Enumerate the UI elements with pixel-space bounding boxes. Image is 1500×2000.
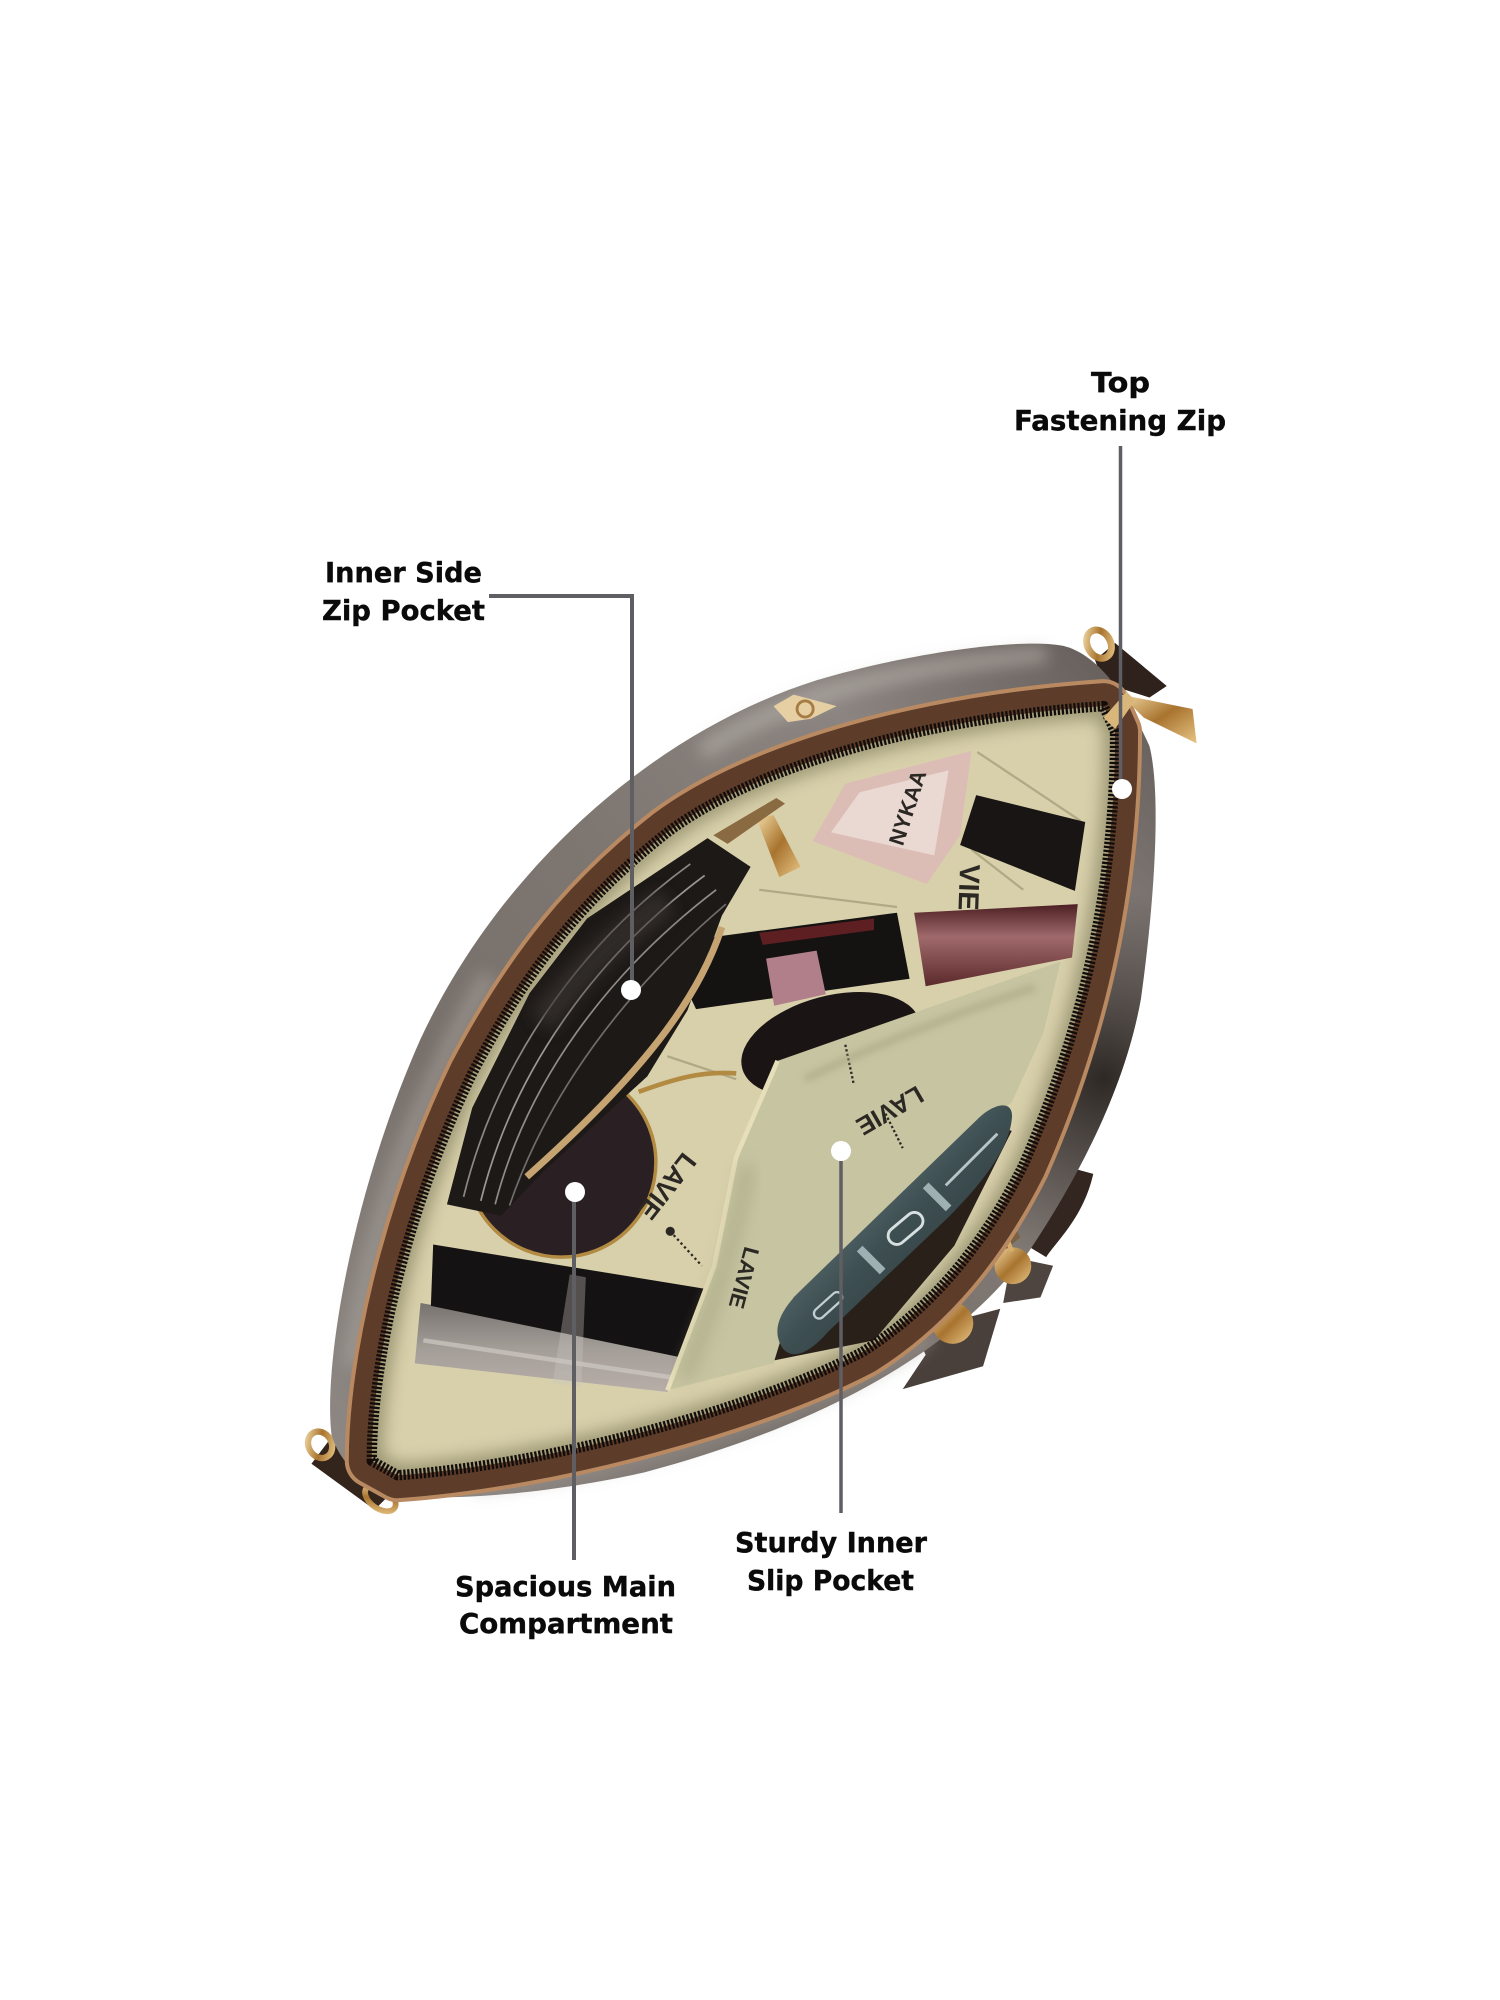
label: spacious main compartment bbox=[455, 1571, 676, 1640]
smartphone in slip pocket bbox=[777, 1105, 1012, 1354]
inner side zip pocket bbox=[447, 838, 751, 1216]
gold charms and chain bbox=[885, 1223, 1031, 1344]
sunglasses bbox=[466, 974, 932, 1257]
hanging tassels bbox=[903, 1168, 1093, 1389]
lining quilting and prints: VIE bbox=[951, 864, 985, 911]
mascara tube bbox=[686, 904, 1078, 1009]
label: top fastening zip bbox=[1014, 367, 1226, 437]
pocket zip pull bbox=[713, 798, 801, 877]
label: inner side zip pocket: Inner Side bbox=[325, 557, 482, 589]
label: inner side zip pocket bbox=[322, 557, 485, 627]
label: sturdy inner slip pocket bbox=[735, 1527, 927, 1597]
bag photo illustration bbox=[303, 625, 1197, 1517]
slip pocket fabric: LAVIE bbox=[851, 1080, 928, 1140]
strap tab and ring: bottom left bbox=[303, 1427, 400, 1517]
dark gap under phone bbox=[774, 1119, 1012, 1360]
leader: inner side zip pocket bbox=[489, 596, 641, 1000]
nail polish bottle: NYKAA bbox=[884, 767, 931, 848]
bag outer shell bbox=[330, 644, 1156, 1497]
label: spacious main compartment: Compartment bbox=[459, 1608, 673, 1640]
leader: top fastening zip bbox=[1112, 446, 1132, 799]
label: inner side zip pocket: Zip Pocket bbox=[322, 595, 485, 627]
gold D-ring on shell bbox=[774, 695, 837, 722]
label: sturdy inner slip pocket: Slip Pocket bbox=[747, 1565, 914, 1597]
label: top fastening zip: Fastening Zip bbox=[1014, 405, 1226, 437]
label: sturdy inner slip pocket: Sturdy Inner bbox=[735, 1527, 927, 1559]
zip teeth bbox=[372, 706, 1115, 1475]
sunglasses: LAVIE bbox=[632, 1147, 702, 1225]
slip pocket fabric bbox=[667, 962, 1061, 1390]
label: top fastening zip: Top bbox=[1091, 367, 1150, 399]
slip pocket fabric: LAVIE bbox=[724, 1244, 764, 1311]
lining quilting and prints bbox=[666, 752, 1081, 1266]
label: spacious main compartment: Spacious Main bbox=[455, 1571, 676, 1603]
nail polish bottle bbox=[813, 751, 1085, 891]
leader: sturdy inner slip pocket bbox=[831, 1141, 851, 1513]
inner edge shadow bbox=[372, 706, 1115, 1475]
leader: spacious main compartment bbox=[565, 1182, 585, 1560]
bag interior lining and contents bbox=[372, 706, 1115, 1476]
compact powder case bbox=[415, 1245, 705, 1392]
strap tab and ring: top right bbox=[1082, 625, 1167, 697]
top zip slider and pull bbox=[1104, 692, 1197, 743]
lining fabric bbox=[372, 706, 1115, 1476]
zip tape and tan piping bbox=[372, 706, 1115, 1475]
infographic canvas bbox=[304, 372, 1225, 1640]
